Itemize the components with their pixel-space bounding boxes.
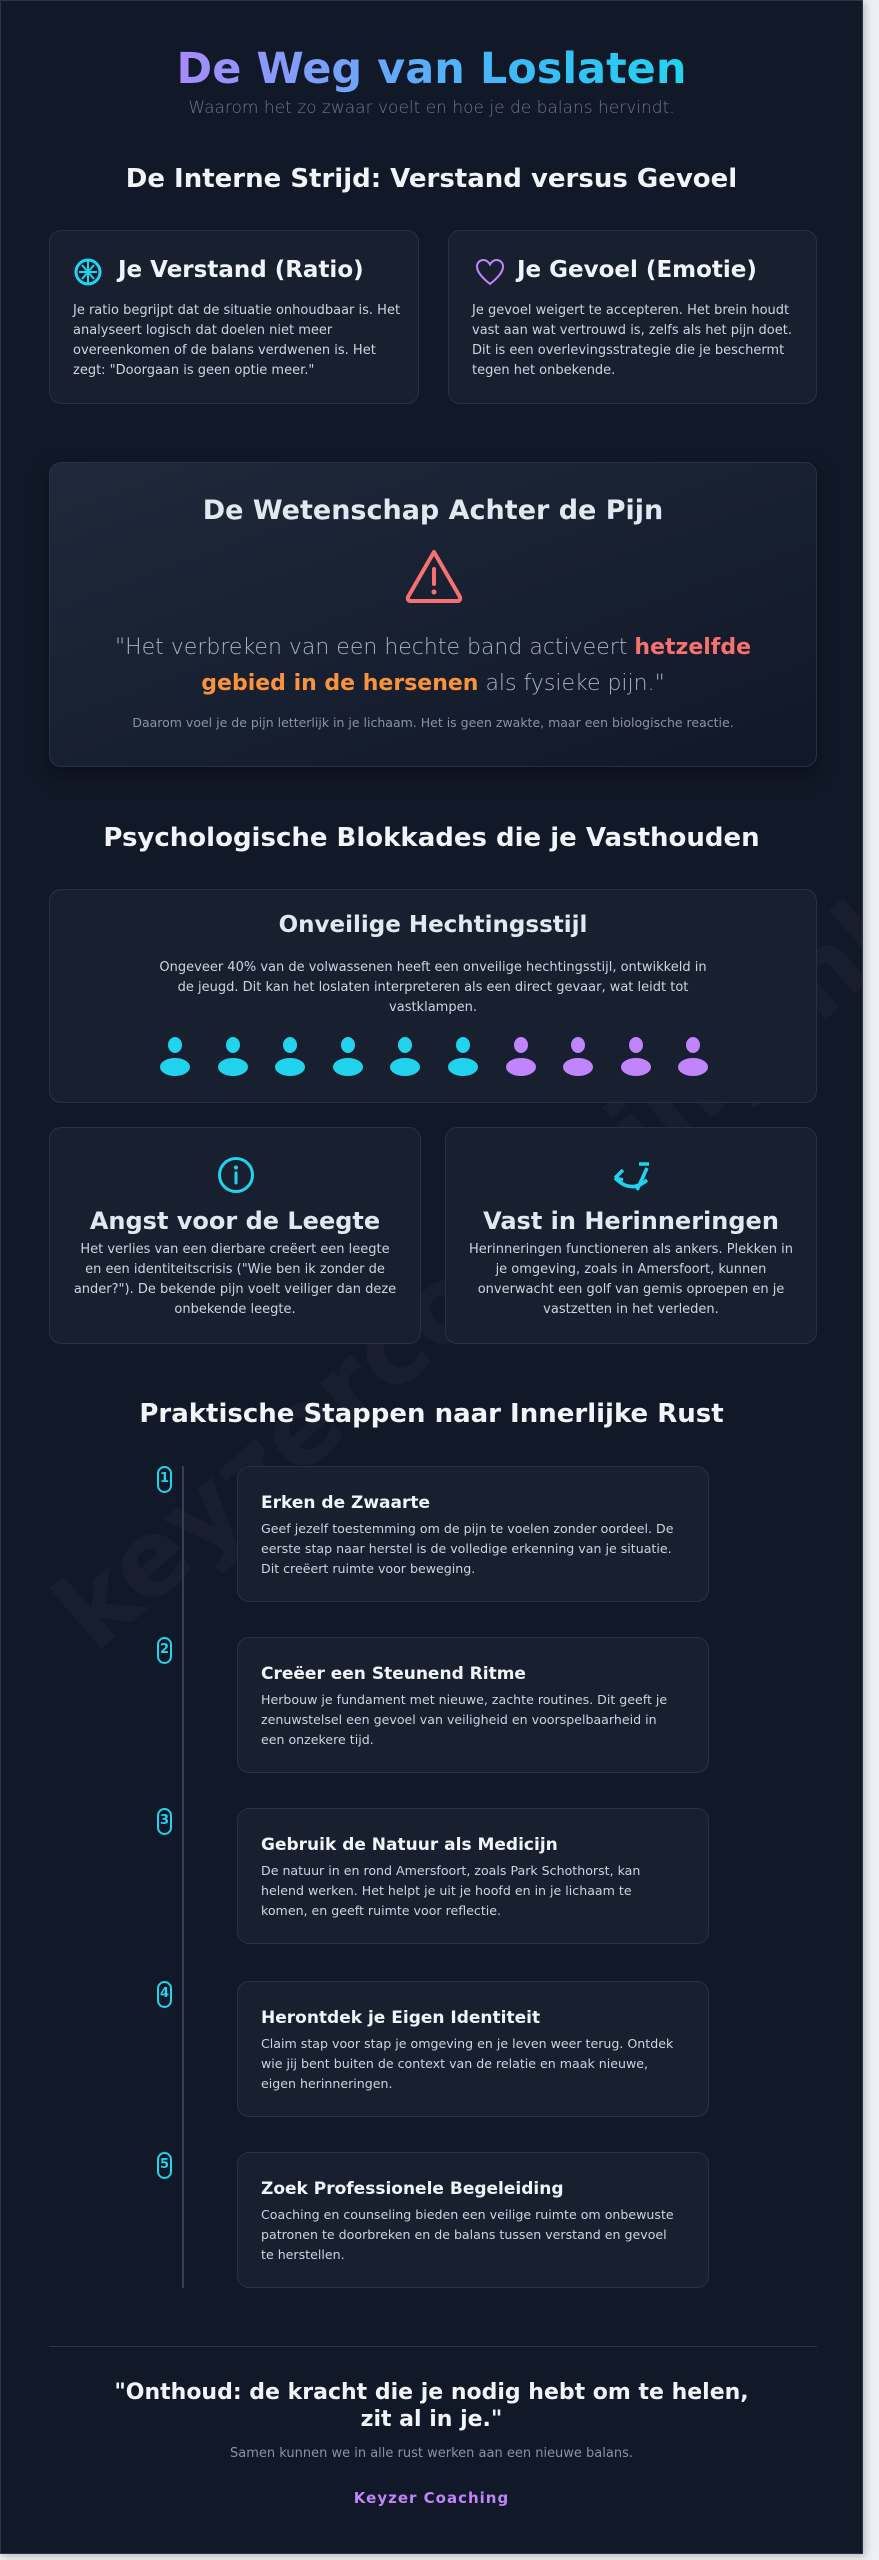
step card: Claim stap voor stap je omgeving en je leven weer terug. Ontdek wie jij bent buiten de context van de relatie en maak nieuwe, eigen herinneringen. — [261, 2036, 673, 2091]
step card: Gebruik de Natuur als Medicijn — [261, 1835, 558, 1855]
step card: Creëer een Steunend Ritme — [261, 1664, 526, 1684]
number badge 5 — [157, 2152, 172, 2179]
quote: gebied in de hersenen als fysieke pijn." — [201, 671, 665, 696]
heading: blokkades: Psychologische Blokkades die je Vasthouden — [103, 823, 760, 853]
number badge 1: 1 — [160, 1471, 169, 1486]
note: Daarom voel je de pijn letterlijk in je lichaam. Het is geen zwakte, maar een biologische reactie. — [132, 715, 734, 730]
card: verstand — [49, 230, 419, 404]
step card: Zoek Professionele Begeleiding — [261, 2179, 564, 2199]
number badge 5: 5 — [160, 2157, 169, 2172]
footer quote — [114, 2380, 749, 2432]
step card: De natuur in en rond Amersfoort, zoals Park Schothorst, kan helend werken. Het helpt je uit je hoofd en in je lichaam te komen, en geeft ruimte voor reflectie. — [261, 1863, 640, 1918]
card: gevoel — [448, 230, 817, 404]
icon: heart — [476, 259, 504, 286]
number badge 2: 2 — [160, 1642, 169, 1657]
number badge 1 — [157, 1466, 172, 1493]
card title: Angst voor de Leegte — [90, 1207, 380, 1235]
panel title: Onveilige Hechtingsstijl — [279, 912, 587, 938]
quote: "Het verbreken van een hechte band activeert hetzelfde — [115, 635, 751, 660]
icon: brain — [74, 258, 102, 286]
chart: people icons 60/40 — [160, 1037, 708, 1076]
number badge 4 — [157, 1981, 172, 2008]
step card: Herbouw je fundament met nieuwe, zachte routines. Dit geeft je zenuwstelsel een gevoel van veiligheid en voorspelbaarheid in een onzekere tijd. — [261, 1692, 667, 1747]
icon: info — [218, 1157, 254, 1193]
step card — [237, 2152, 709, 2288]
footer quote: zit al in je." — [361, 2407, 502, 2432]
panel: hechtingsstijl — [49, 889, 817, 1103]
step 5 — [157, 2152, 709, 2288]
panel title: De Wetenschap Achter de Pijn — [203, 495, 663, 526]
card text: Je ratio begrijpt dat de situatie onhoudbaar is. Het analyseert logisch dat doelen niet meer overeenkomen of de balans verdwenen is. Het zegt: "Doorgaan is geen optie meer." — [73, 303, 400, 378]
step card: Geef jezelf toestemming om de pijn te voelen zonder oordeel. De eerste stap naar herstel is de volledige erkenning van je situatie. Dit creëert ruimte voor beweging. — [261, 1521, 673, 1576]
card text: Je gevoel weigert te accepteren. Het brein houdt vast aan wat vertrouwd is, zelfs als het pijn doet. Dit is een overlevingsstrategie die je beschermt tegen het onbekende. — [472, 303, 792, 378]
step 4 — [157, 1981, 709, 2117]
number badge 2 — [157, 1637, 172, 1664]
number badge 4: 4 — [160, 1986, 169, 2001]
card text: Herinneringen functioneren als ankers. Plekken in je omgeving, zoals in Amersfoort, kunnen onverwacht een golf van gemis oproepen en je vastzetten in het verleden. — [469, 1242, 793, 1317]
step card — [237, 1637, 709, 1773]
icon: warning — [406, 550, 462, 603]
card: angst voor de leegte — [49, 1127, 421, 1344]
timeline line — [182, 1466, 184, 2288]
step card — [237, 1981, 709, 2117]
footer subtext: Samen kunnen we in alle rust werken aan een nieuwe balans. — [230, 2446, 633, 2461]
step 1 — [157, 1466, 709, 1602]
icon: anchor/hook — [614, 1162, 649, 1191]
heading: interne strijd: De Interne Strijd: Verstand versus Gevoel — [126, 164, 737, 194]
text: Ongeveer 40% van de volwassenen heeft een onveilige hechtingsstijl, ontwikkeld in de jeugd. Dit kan het loslaten interpreteren als een direct gevaar, wat leidt tot vastklampen. — [159, 960, 707, 1015]
step card: Erken de Zwaarte — [261, 1493, 430, 1513]
card: vast in herinneringen — [445, 1127, 817, 1344]
footer quote: "Onthoud: de kracht die je nodig hebt om te helen, — [114, 2380, 749, 2405]
number badge 3: 3 — [160, 1813, 169, 1828]
step 3 — [157, 1808, 709, 1944]
step card: Herontdek je Eigen Identiteit — [261, 2008, 540, 2028]
card title: Je Gevoel (Emotie) — [517, 257, 757, 283]
brand: Keyzer Coaching — [354, 2489, 509, 2507]
card title: Je Verstand (Ratio) — [118, 257, 364, 283]
step card — [237, 1808, 709, 1944]
subtitle: Waarom het zo zwaar voelt en hoe je de balans hervindt. — [188, 98, 675, 118]
step card — [237, 1466, 709, 1602]
step card: Coaching en counseling bieden een veilige ruimte om onbewuste patronen te doorbreken en de balans tussen verstand en gevoel te herstellen. — [261, 2207, 674, 2262]
number badge 3 — [157, 1808, 172, 1835]
quote — [115, 635, 751, 696]
card text: Het verlies van een dierbare creëert een leegte en een identiteitscrisis ("Wie ben ik zonder de ander?"). De bekende pijn voelt veiliger dan deze onbekende leegte. — [74, 1242, 396, 1317]
step 2 — [157, 1637, 709, 1773]
card title: Vast in Herinneringen — [483, 1207, 779, 1235]
panel: wetenschap — [49, 462, 817, 767]
title: De Weg van Loslaten — [177, 44, 686, 94]
heading: praktische stappen: Praktische Stappen naar Innerlijke Rust — [139, 1399, 724, 1429]
